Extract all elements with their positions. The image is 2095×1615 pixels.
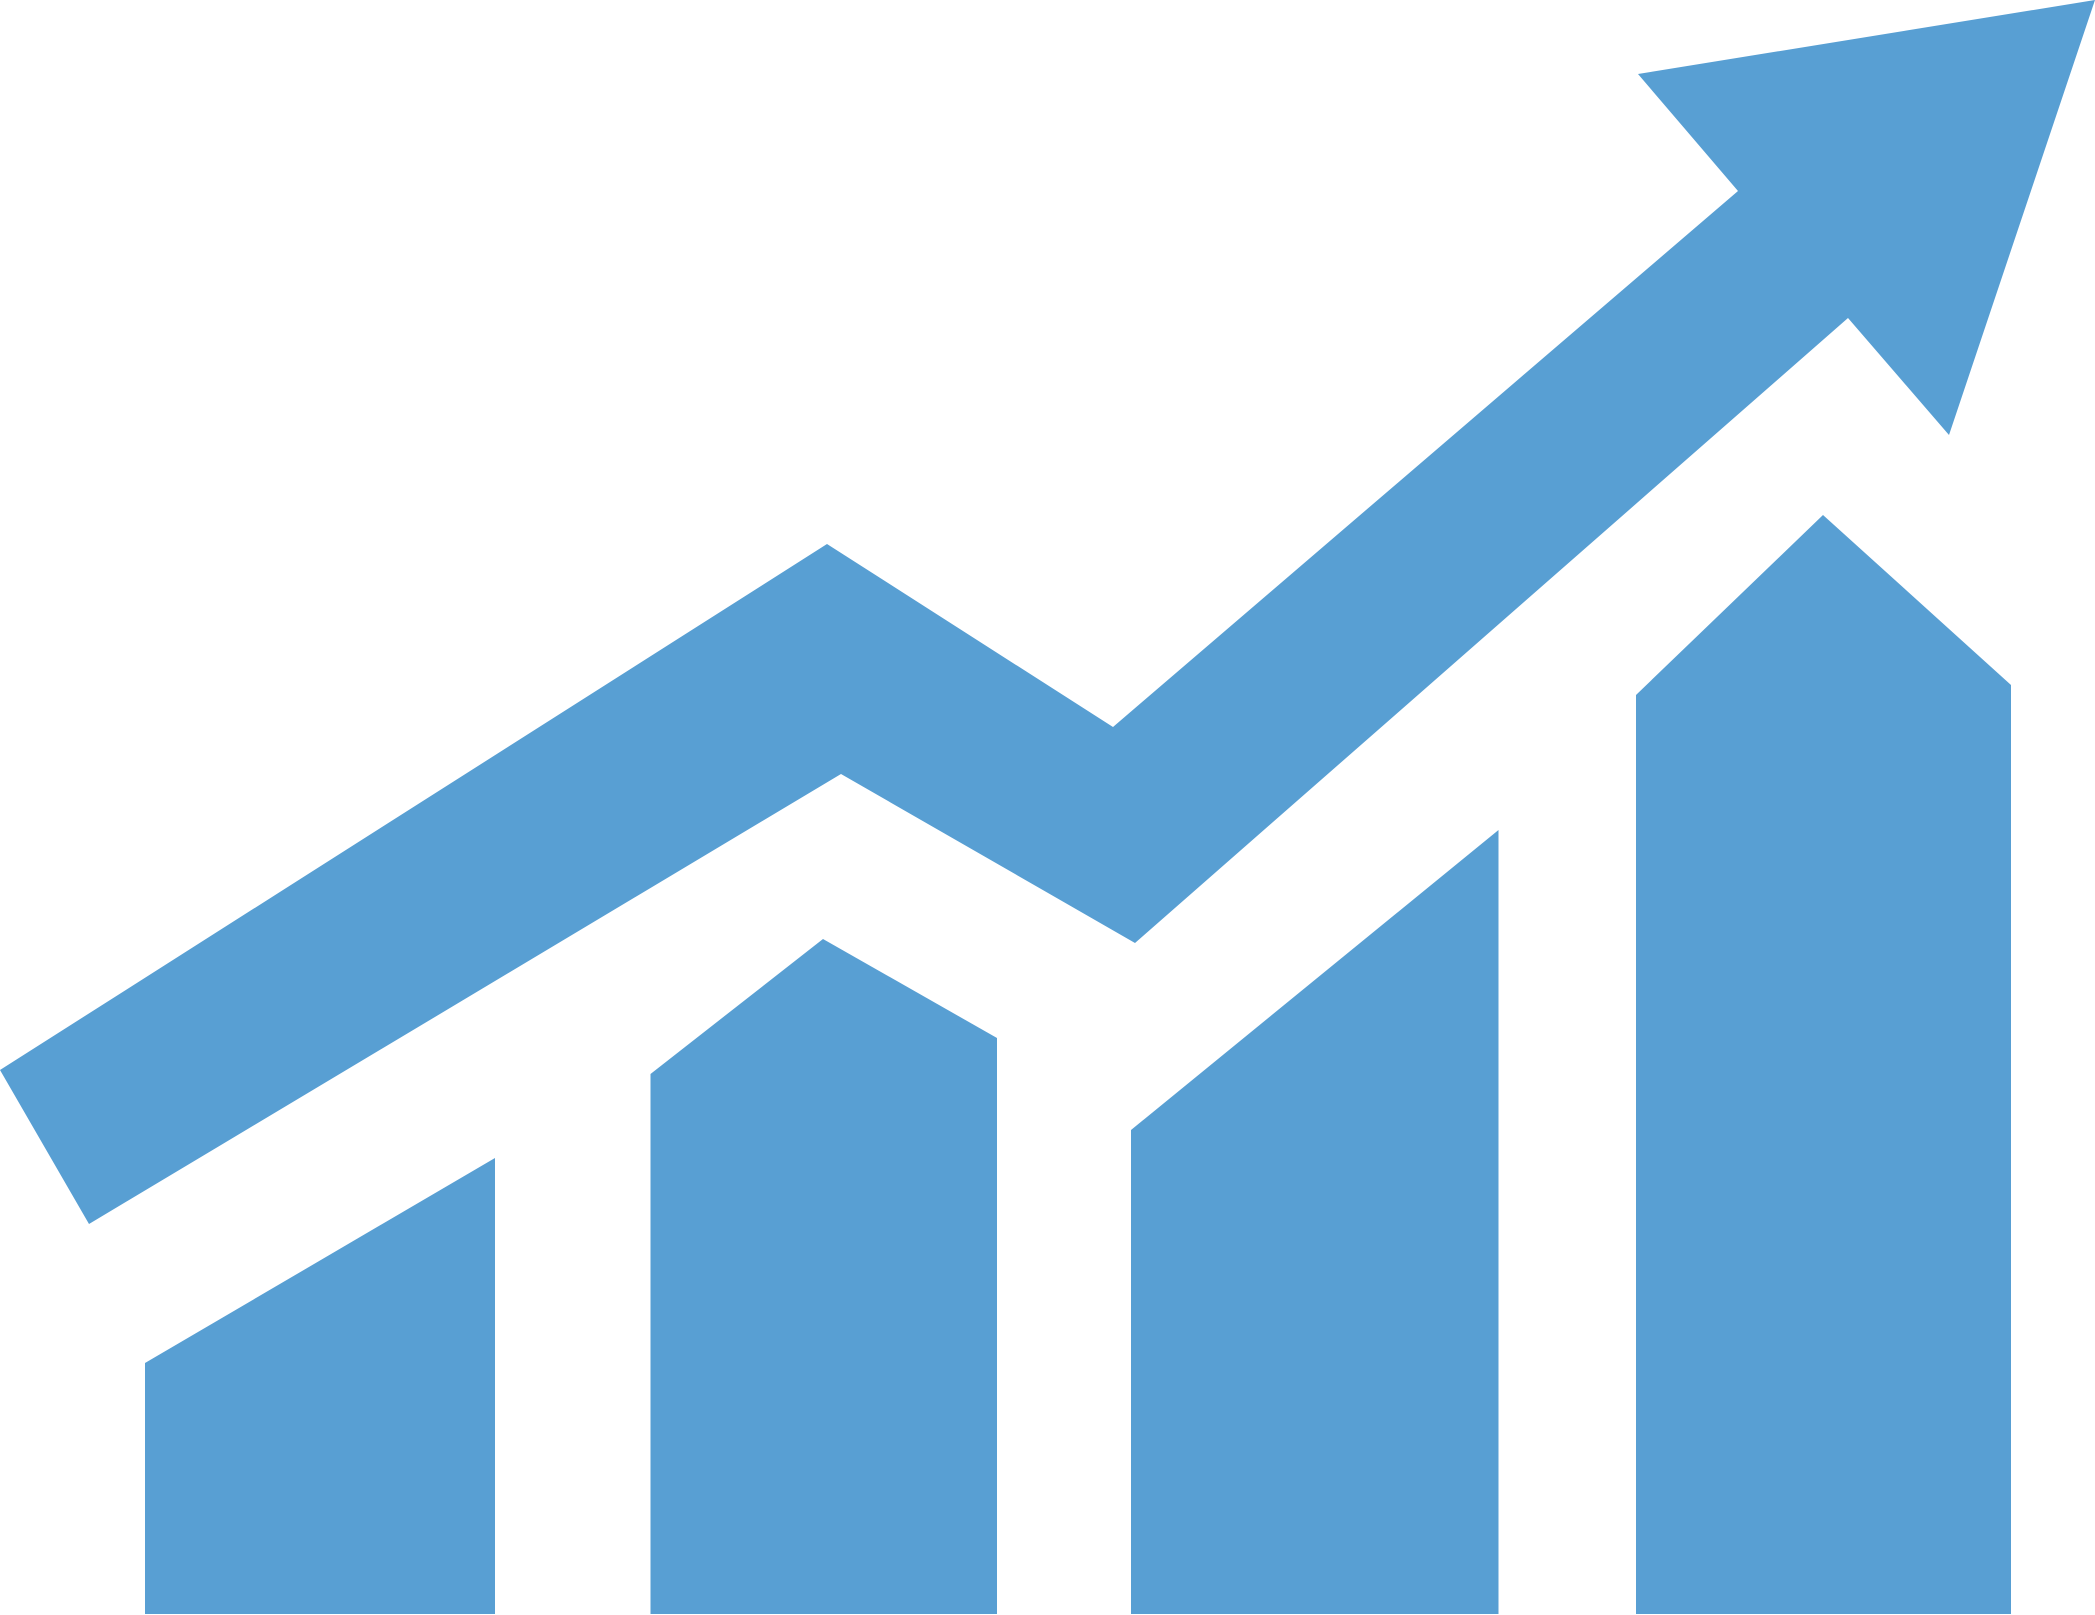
arrow: rising trend line	[0, 0, 2095, 1224]
bar 2	[650, 939, 997, 1614]
bar 3	[1131, 830, 1498, 1614]
bar 1	[145, 1158, 495, 1614]
bar 4	[1636, 515, 2011, 1614]
